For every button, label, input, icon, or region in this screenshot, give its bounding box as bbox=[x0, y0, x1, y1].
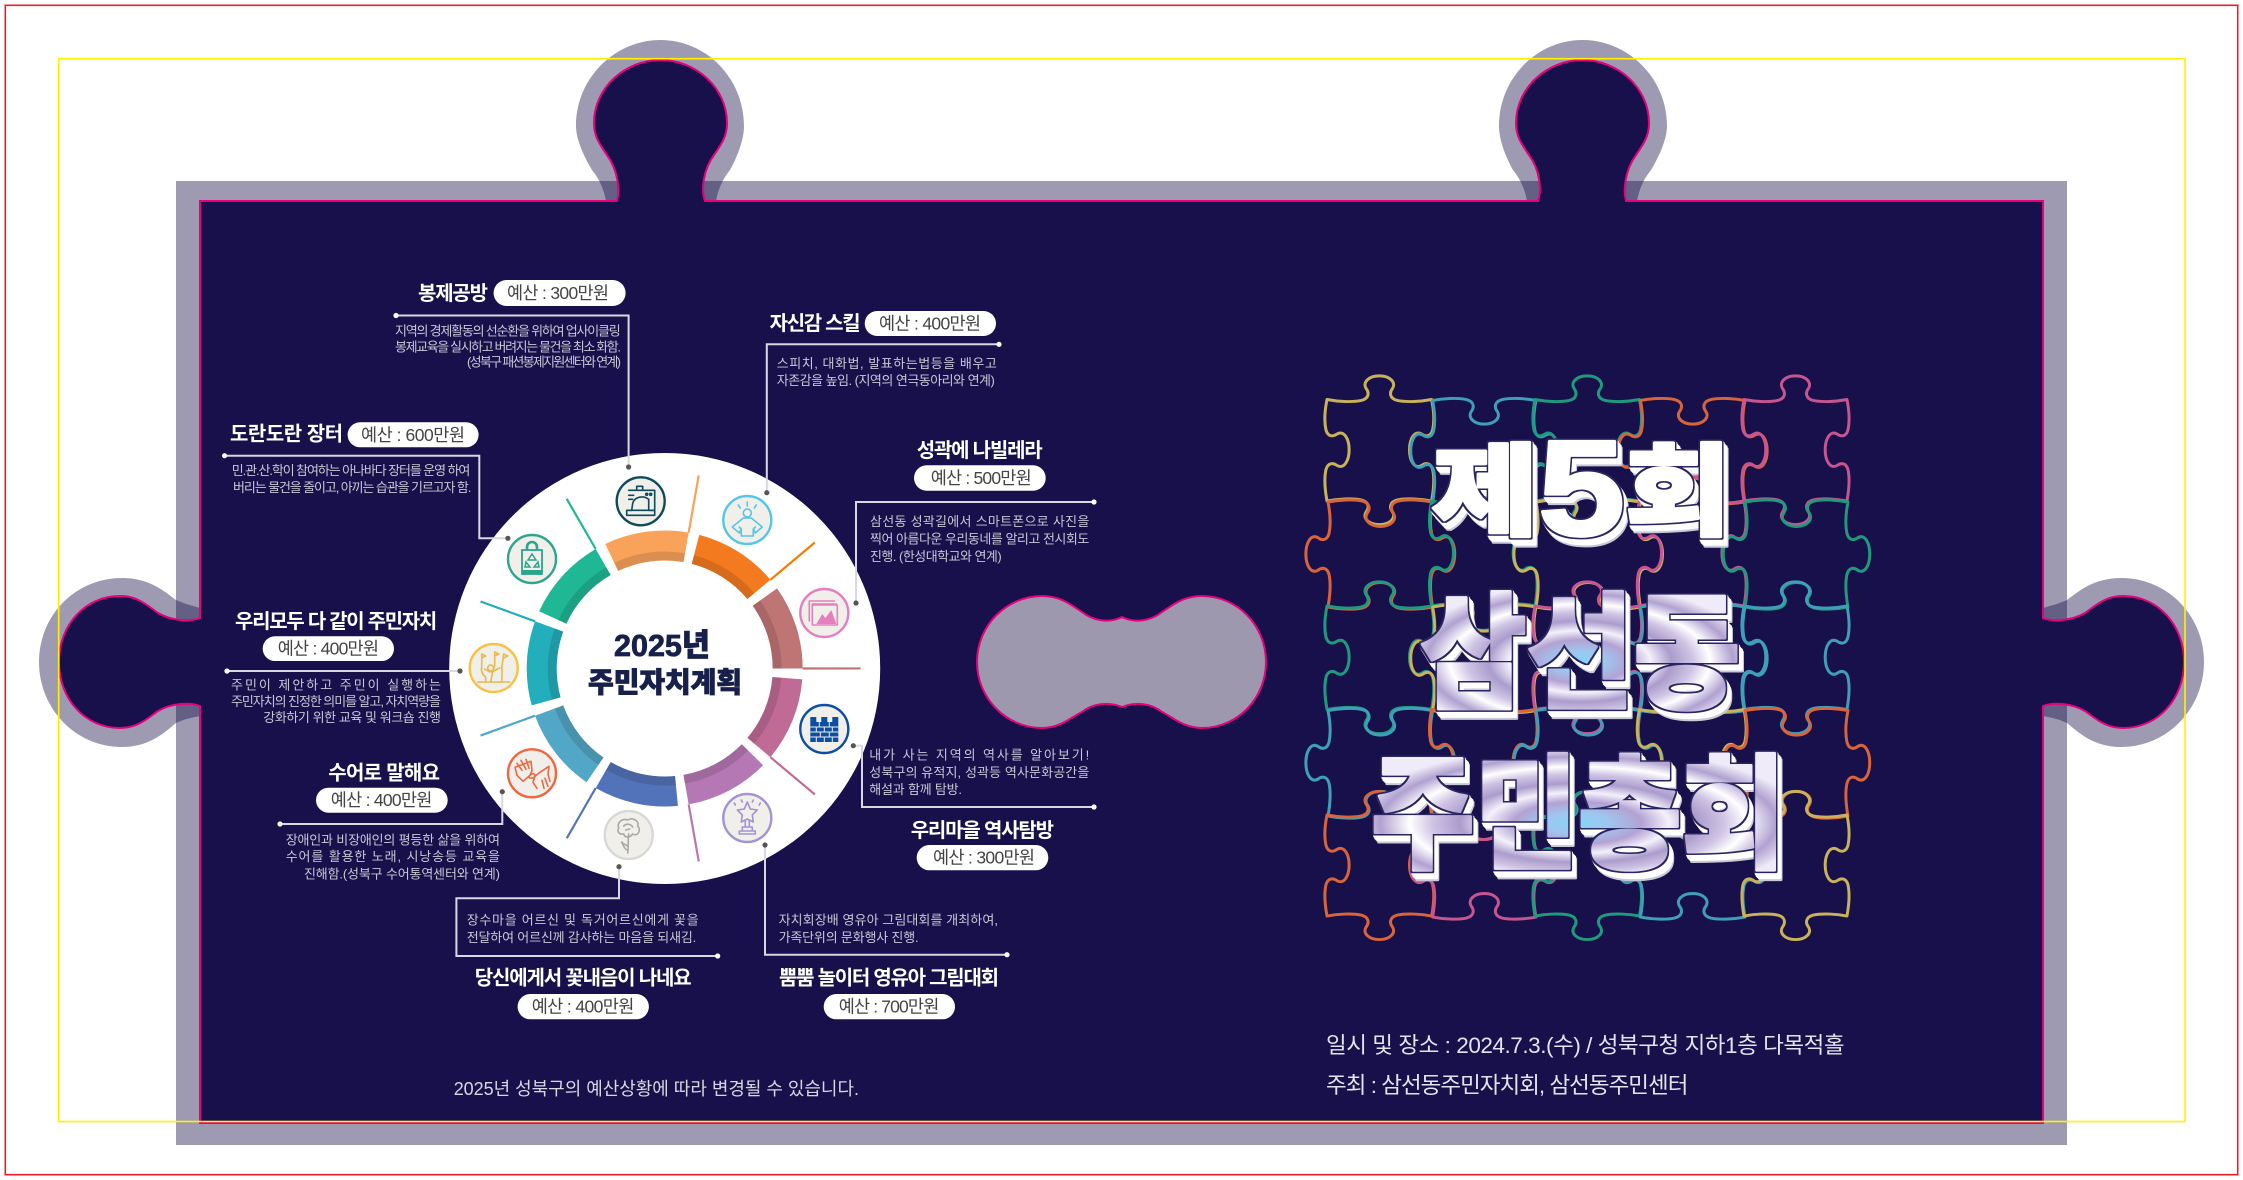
item heading: 봉제공방 bbox=[418, 282, 488, 305]
wheel centre title: 2025년 bbox=[614, 628, 710, 663]
item heading: 수어로 말해요 bbox=[328, 761, 440, 784]
budget pill bbox=[348, 422, 479, 447]
item: sewing workshop bbox=[393, 280, 631, 470]
description: 장애인과 비장애인의 평등한 삶을 위하여 bbox=[286, 832, 500, 848]
description: 지역의 경제활동의 선순환을 위하여 업사이클링 bbox=[395, 324, 621, 338]
item heading: 당신에게서 꽃내음이 나네요 bbox=[475, 967, 692, 990]
description: 봉제교육을 실시하고 버려지는 물건을 최소 화함. bbox=[395, 340, 621, 354]
description bbox=[870, 514, 1089, 564]
title line 1: 회 bbox=[1625, 437, 1731, 549]
description: 해설과 함께 탐방. bbox=[869, 782, 962, 797]
description: 스피치, 대화법, 발표하는법등을 배우고 bbox=[777, 356, 997, 371]
item heading: 우리마을 역사탐방 bbox=[911, 819, 1054, 842]
budget pill bbox=[518, 994, 649, 1019]
item: carnation delivery bbox=[456, 864, 720, 1019]
connector bbox=[224, 668, 463, 674]
wheel disc bbox=[449, 453, 880, 884]
title line 2: 삼선동 bbox=[1420, 584, 1740, 725]
item: fortress wall photo bbox=[853, 439, 1097, 606]
item heading: 자신감 스킬 bbox=[770, 312, 861, 335]
description: 찍어 아름다운 우리동네를 알리고 전시회도 bbox=[870, 532, 1089, 546]
description bbox=[779, 912, 998, 945]
description bbox=[232, 463, 471, 495]
budget pill bbox=[494, 280, 626, 306]
budget pill bbox=[263, 636, 394, 661]
description bbox=[467, 912, 699, 945]
item: village history tour bbox=[851, 743, 1097, 870]
budget pill bbox=[914, 465, 1046, 491]
budget pill: 예산 : 700만원 bbox=[839, 997, 939, 1017]
wheel ring segments bbox=[474, 470, 866, 865]
description: 버리는 물건을 줄이고, 아끼는 습관을 기르고자 함. bbox=[233, 480, 471, 495]
budget pill bbox=[316, 788, 448, 813]
description: 전달하여 어르신께 감사하는 마음을 되새김. bbox=[467, 930, 696, 945]
description: 내가 사는 지역의 역사를 알아보기! bbox=[869, 748, 1089, 762]
connector bbox=[393, 313, 631, 470]
description: 주민이 제안하고 주민이 실행하는 bbox=[231, 678, 441, 692]
budget pill bbox=[824, 994, 955, 1019]
item: sign language bbox=[277, 761, 505, 882]
connector bbox=[222, 453, 510, 541]
description bbox=[286, 832, 500, 882]
main title bbox=[1371, 412, 1785, 885]
description bbox=[869, 748, 1089, 797]
event details bbox=[1326, 1033, 1845, 1098]
icon: photo gallery bbox=[800, 589, 848, 637]
connector bbox=[853, 499, 1097, 606]
budget pill: 예산 : 300만원 bbox=[933, 848, 1035, 868]
description: 강화하기 위한 교육 및 워크숍 진행 bbox=[263, 710, 441, 725]
icon: sign language hands bbox=[508, 749, 556, 797]
budget pill: 예산 : 600만원 bbox=[361, 425, 465, 445]
wheel centre title: 주민자치계획 bbox=[588, 667, 742, 698]
budget pill: 예산 : 300만원 bbox=[507, 283, 609, 303]
description: 수어를 활용한 노래, 시낭송등 교육을 bbox=[286, 849, 500, 864]
budget pill bbox=[917, 845, 1048, 870]
description: 진행. (한성대학교와 연계) bbox=[870, 549, 1002, 564]
description: 장수마을 어르신 및 독거어르신에게 꽃을 bbox=[467, 912, 699, 928]
description: 성북구의 유적지, 성곽등 역사문화공간을 bbox=[869, 765, 1089, 780]
connector bbox=[764, 342, 1002, 495]
description: 민.관.산.학이 참여하는 아나바다 장터를 운영 하여 bbox=[232, 463, 470, 478]
donut wheel bbox=[449, 453, 880, 884]
icon: raised hands with flags bbox=[470, 644, 518, 692]
item: resident autonomy bbox=[224, 610, 463, 725]
description: 자치회장배 영유아 그림대회를 개최하여, bbox=[779, 912, 998, 928]
centre puzzle slot bbox=[977, 596, 1266, 728]
title line 1: 5 bbox=[1538, 412, 1625, 564]
connector bbox=[851, 743, 1097, 810]
description: 진해함.(성북구 수어통역센터와 연계) bbox=[304, 866, 500, 882]
icon: fortress wall bbox=[800, 705, 848, 753]
description: 삼선동 성곽길에서 스마트폰으로 사진을 bbox=[870, 514, 1089, 529]
connector bbox=[277, 789, 505, 827]
budget pill: 예산 : 400만원 bbox=[278, 639, 379, 659]
description bbox=[395, 324, 621, 370]
item: drawing contest bbox=[762, 842, 1010, 1019]
title line 3: 주민총회 bbox=[1371, 747, 1785, 885]
description: 주민자치의 진정한 의미를 알고, 자치역량을 bbox=[231, 694, 441, 709]
date and venue: 일시 및 장소 : 2024.7.3.(수) / 성북구청 지하1층 다목적홀 bbox=[1326, 1033, 1845, 1058]
description: 가족단위의 문화행사 진행. bbox=[779, 930, 919, 945]
wheel centre title bbox=[588, 628, 742, 698]
item: community market bbox=[222, 422, 510, 541]
budget pill: 예산 : 500만원 bbox=[931, 468, 1032, 488]
connector bbox=[456, 864, 720, 959]
description: (성북구 패션봉제지원센터와 연계) bbox=[467, 354, 621, 370]
item: confidence skills bbox=[764, 311, 1002, 495]
title line 1: 제 bbox=[1432, 437, 1524, 549]
icon: recycling bag bbox=[508, 535, 556, 583]
organizers: 주최 : 삼선동주민자치회, 삼선동주민센터 bbox=[1326, 1073, 1688, 1098]
footnote: 2025년 성북구의 예산상황에 따라 변경될 수 있습니다. bbox=[454, 1079, 859, 1099]
icon: sewing machine bbox=[617, 477, 665, 525]
item heading: 도란도란 장터 bbox=[230, 422, 343, 446]
budget pill bbox=[865, 311, 996, 336]
item heading: 우리모두 다 같이 주민자치 bbox=[235, 610, 437, 633]
item heading: 뿜뿜 놀이터 영유아 그림대회 bbox=[779, 967, 999, 990]
icon: carnation bbox=[605, 811, 653, 859]
description bbox=[231, 678, 441, 725]
puzzle outline grid bbox=[1306, 376, 1870, 940]
icon: confident person bbox=[723, 496, 771, 544]
item heading: 성곽에 나빌레라 bbox=[917, 439, 1043, 462]
connector bbox=[762, 842, 1010, 957]
budget pill: 예산 : 400만원 bbox=[879, 314, 981, 334]
icon: trophy bbox=[723, 794, 771, 842]
budget pill: 예산 : 400만원 bbox=[532, 997, 634, 1017]
description bbox=[777, 356, 997, 388]
description: 자존감을 높임. (지역의 연극동아리와 연계) bbox=[777, 373, 995, 388]
budget pill: 예산 : 400만원 bbox=[331, 790, 432, 810]
